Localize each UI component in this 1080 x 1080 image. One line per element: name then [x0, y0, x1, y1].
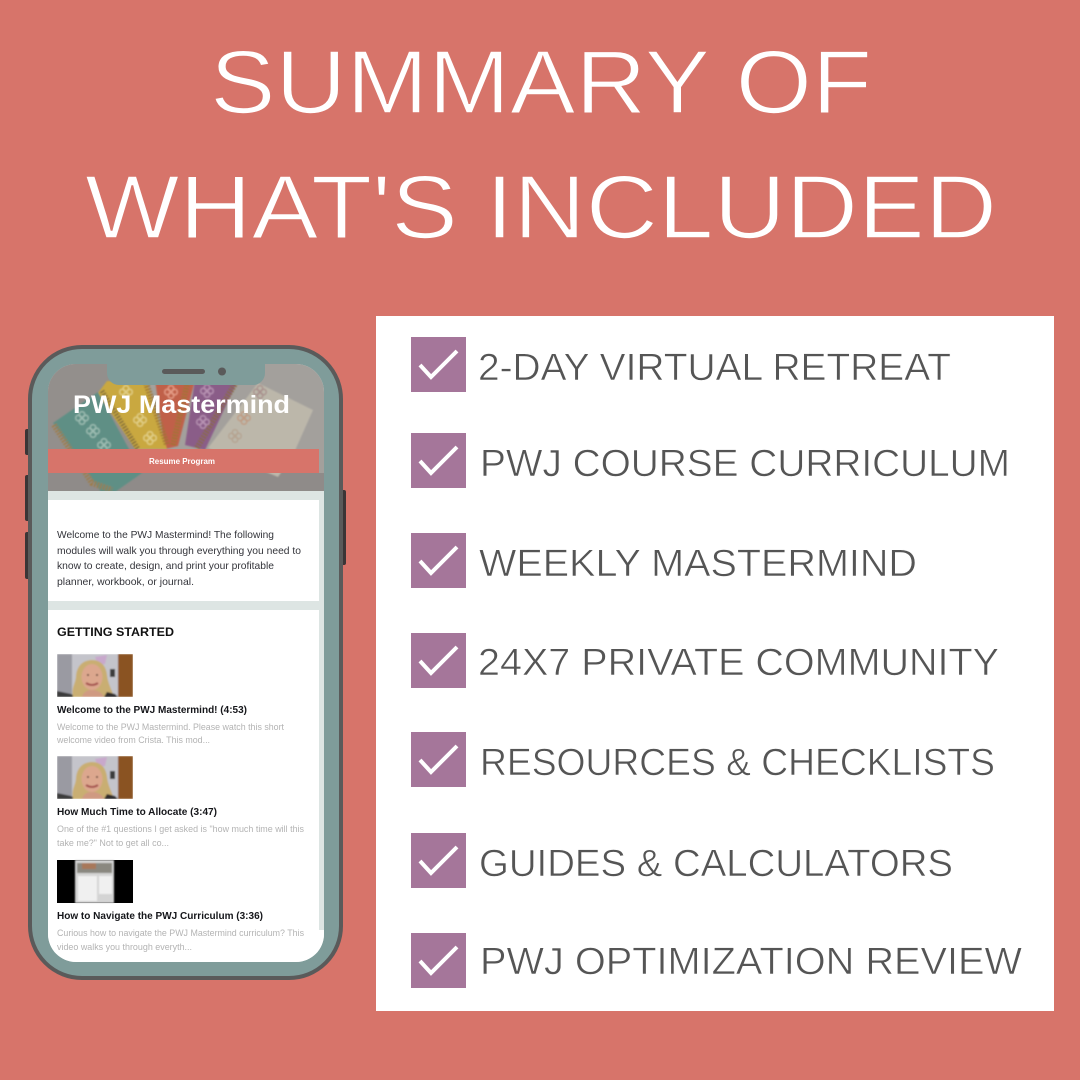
- item: weekly mastermind: WEEKLY MASTERMIND: [479, 543, 917, 585]
- thumbnail: curriculum video: [57, 860, 133, 903]
- button: resume program: [48, 449, 319, 473]
- item: 24x7 private community: [411, 633, 999, 688]
- welcome text: planner, workbook, or journal.: [57, 576, 194, 588]
- lesson 1: Welcome to the PWJ Mastermind. Please watch this short: [57, 722, 284, 733]
- item: 2-day virtual retreat: [411, 337, 951, 392]
- title: [85, 33, 997, 258]
- lesson 3: Curious how to navigate the PWJ Mastermind curriculum? This: [57, 928, 304, 939]
- lesson 1: Welcome to the PWJ Mastermind! (4:53): [57, 705, 247, 716]
- lesson 3: How to Navigate the PWJ Curriculum (3:36): [57, 911, 263, 922]
- heading: getting started: GETTING STARTED: [57, 625, 174, 639]
- item: resources and checklists: [411, 732, 995, 787]
- hero title: PWJ Mastermind: [73, 391, 290, 419]
- item: PWJ course curriculum: PWJ COURSE CURRICULUM: [480, 443, 1010, 485]
- item: guides and calculators: [411, 833, 953, 888]
- lesson 2: [57, 756, 304, 849]
- hero image: notebooks: [48, 364, 324, 492]
- notch: [107, 362, 265, 385]
- thumbnail: welcome video: [57, 654, 133, 697]
- lesson 3: video walks you through everyth...: [57, 942, 192, 953]
- item: PWJ optimization review: [411, 933, 1022, 988]
- item: 2-day virtual retreat: 2-DAY VIRTUAL RETREAT: [478, 347, 951, 389]
- lesson 2: How Much Time to Allocate (3:47): [57, 807, 217, 818]
- item: PWJ optimization review: PWJ OPTIMIZATION REVIEW: [480, 941, 1022, 983]
- welcome text: know to create, design, and print your profitable: [57, 560, 274, 572]
- button: resume program: Resume Program: [149, 457, 215, 466]
- item: resources and checklists: RESOURCES & CHECKLISTS: [480, 742, 995, 784]
- lesson 3: [57, 860, 304, 953]
- welcome text: modules will walk you through everything you need to: [57, 545, 301, 557]
- item: 24x7 private community: 24X7 PRIVATE COMMUNITY: [478, 642, 999, 684]
- card: getting started background: [48, 610, 324, 962]
- lesson 1: [56, 654, 284, 746]
- thumbnail: time video: [57, 756, 133, 799]
- title: WHAT'S INCLUDED: [85, 158, 997, 258]
- lesson 1: welcome video from Crista. This mod...: [56, 735, 210, 746]
- title: SUMMARY OF: [210, 33, 872, 133]
- panel: checklist: [376, 316, 1054, 1011]
- phone screen: [48, 364, 324, 962]
- item: guides and calculators: GUIDES & CALCULATORS: [479, 843, 953, 885]
- phone body: [30, 347, 341, 978]
- lesson 2: take me?" Not to get all co...: [57, 838, 169, 849]
- welcome text: [57, 529, 301, 588]
- item: weekly mastermind: [411, 533, 917, 588]
- panel: phone mockup: [25, 347, 346, 978]
- card: welcome background: [48, 500, 319, 601]
- icon: phone side buttons: [25, 429, 346, 579]
- welcome text: Welcome to the PWJ Mastermind! The following: [57, 529, 274, 541]
- lesson 2: One of the #1 questions I get asked is "how much time will this: [57, 824, 304, 835]
- item: PWJ course curriculum: [411, 433, 1010, 488]
